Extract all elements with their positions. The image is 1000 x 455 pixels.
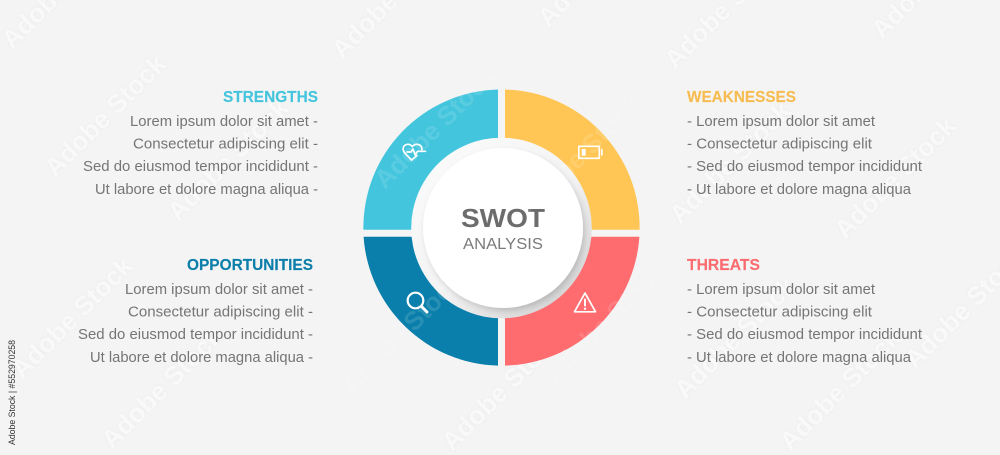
watermark over donut: Adobe Stock [513,88,647,222]
stock id side label: Adobe Stock | #552970258 [7,340,18,445]
watermark over donut: Adobe Stock [335,265,469,399]
watermark pattern: Adobe Stock [95,320,229,454]
segment: threats [505,237,639,366]
threats list [687,282,922,366]
center title: SWOT [461,203,545,233]
segment: opportunities [364,237,498,366]
opportunities list: Consectetur adipiscing elit - [128,304,313,320]
opportunities list: Sed do eiusmod tempor incididunt - [78,327,313,343]
weaknesses list [687,114,922,198]
weaknesses list: - Lorem ipsum dolor sit amet [687,114,875,130]
center subtitle: ANALYSIS [463,236,543,253]
strengths list: Lorem ipsum dolor sit amet - [130,114,318,130]
weaknesses list: - Consectetur adipiscing elit [687,136,872,152]
heading: threats: THREATS [687,257,760,274]
threats list: - Sed do eiusmod tempor incididunt [687,327,922,343]
strengths list: Sed do eiusmod tempor incididunt - [83,159,318,175]
icon: magnifying glass [408,293,427,312]
watermark pattern: Adobe Stock [668,270,802,404]
segment: strengths [363,90,498,230]
icon: low battery [579,146,602,158]
donut chart [363,90,640,366]
watermark pattern: Adobe Stock [5,250,139,384]
watermark pattern: Adobe Stock [828,110,962,244]
watermark over donut: Adobe Stock [538,255,672,389]
icon: warning triangle [574,293,596,312]
threats list: - Ut labore et dolore magna aliqua [687,350,912,366]
strengths list [83,114,318,198]
heading: opportunities: OPPORTUNITIES [187,257,313,274]
panel: weaknesses text [687,89,922,198]
segment: weaknesses [505,90,640,230]
watermark pattern: Adobe Stock [773,322,907,455]
heading: weaknesses: WEAKNESSES [687,89,796,106]
watermark pattern: Adobe Stock [161,92,295,226]
heading: strengths: STRENGTHS [223,89,318,106]
watermark pattern: Adobe Stock [38,48,172,182]
center disc [423,148,583,308]
watermark over donut [335,60,672,399]
panel: threats text [687,257,922,366]
panel: strengths text [83,89,318,198]
watermark over donut: Adobe Stock [368,60,502,194]
panel: opportunities text [78,257,313,366]
opportunities list: Ut labore et dolore magna aliqua - [90,350,313,366]
watermark pattern: Adobe Stock [435,322,569,455]
opportunities list [78,282,313,366]
disc halo ring [411,138,592,318]
opportunities list: Lorem ipsum dolor sit amet - [125,282,313,298]
strengths list: Ut labore et dolore magna aliqua - [95,182,318,198]
icon: heart with pulse [403,144,426,160]
watermark pattern: Adobe Stock [663,95,797,229]
threats list: - Consectetur adipiscing elit [687,304,872,320]
threats list: - Lorem ipsum dolor sit amet [687,282,875,298]
weaknesses list: - Sed do eiusmod tempor incididunt [687,159,922,175]
weaknesses list: - Ut labore et dolore magna aliqua [687,182,912,198]
strengths list: Consectetur adipiscing elit - [133,136,318,152]
